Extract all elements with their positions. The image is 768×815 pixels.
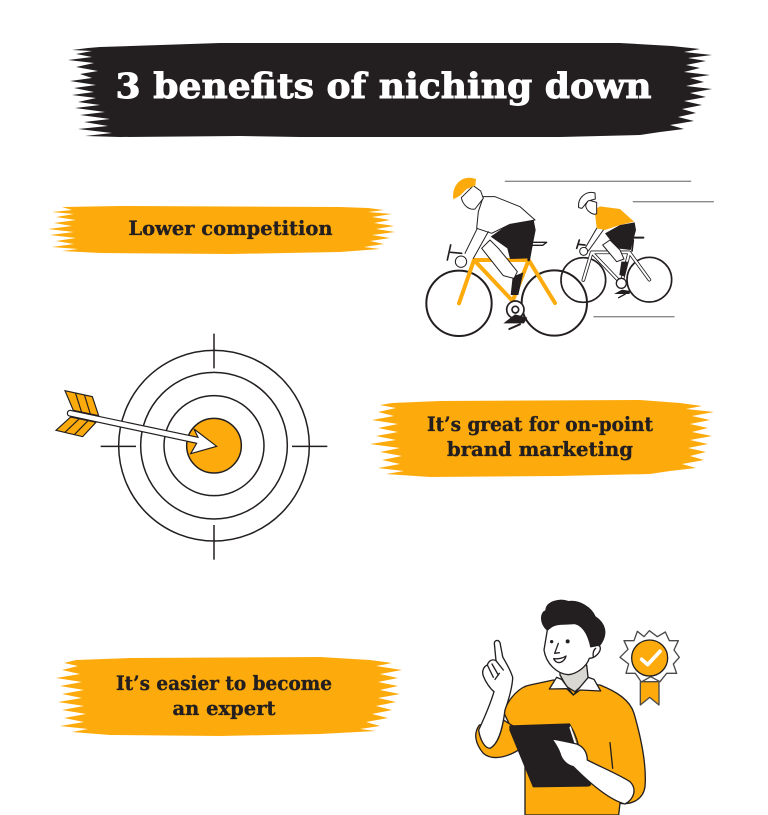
- panel: on-point brand marketing: [370, 400, 714, 477]
- arrow shaft and head: [67, 410, 217, 454]
- raised arm and hand: [479, 640, 513, 748]
- front cyclist: [426, 178, 587, 336]
- right arm and pointing hand: [552, 739, 634, 804]
- label line 2: an expert: [172, 696, 276, 720]
- title banner: [68, 43, 712, 137]
- label line 2: brand marketing: [447, 437, 633, 461]
- sweater seam: [610, 743, 613, 768]
- panel: lower competition: [48, 206, 395, 254]
- orange brush: [370, 400, 714, 477]
- label: Lower competition: [128, 216, 333, 240]
- orange brush: [48, 206, 395, 254]
- head: [544, 620, 600, 675]
- sweater body: [503, 680, 645, 815]
- label: It’s easier to become: [116, 671, 332, 695]
- panel: easier to become an expert: [56, 657, 402, 736]
- badge: [620, 631, 679, 705]
- neck and collar: [560, 665, 588, 692]
- hair: [542, 600, 605, 647]
- illustration: man with tablet and badge: [476, 600, 679, 815]
- face details: [550, 639, 596, 663]
- rear cyclist: [561, 192, 672, 302]
- arrow fletching: [56, 391, 99, 437]
- title text: 3 benefits of niching down: [116, 66, 652, 107]
- illustration: cyclists: [426, 178, 713, 336]
- tablet: [510, 724, 591, 787]
- speed lines: [505, 181, 713, 317]
- left sleeve: [476, 720, 525, 758]
- crosshair ticks: [101, 334, 327, 560]
- target rings: [119, 350, 309, 541]
- label: It’s great for on-point: [427, 412, 654, 436]
- illustration: target with arrow: [56, 334, 327, 560]
- orange brush: [56, 657, 402, 736]
- banner brush shape: [68, 43, 712, 137]
